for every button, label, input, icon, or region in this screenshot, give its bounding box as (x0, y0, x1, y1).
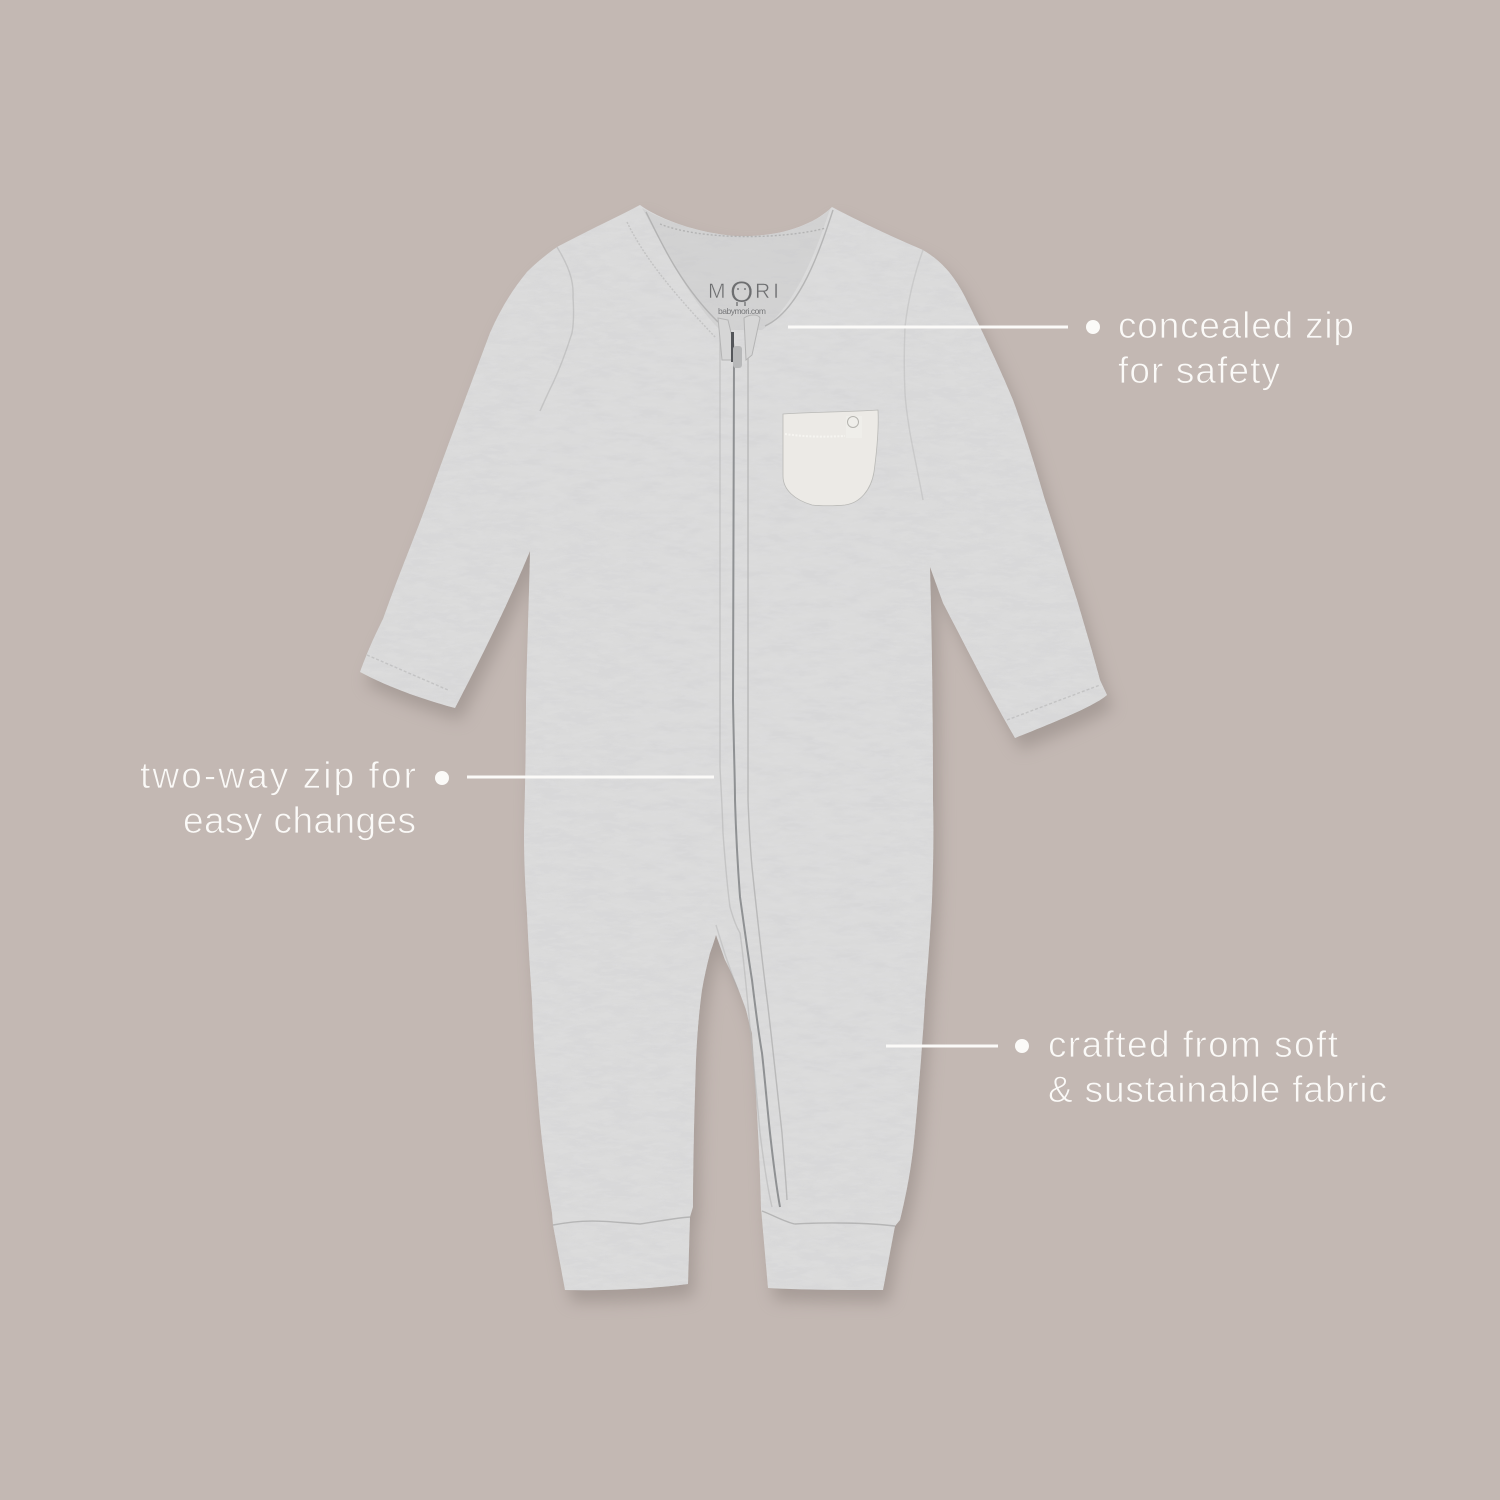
callout: two-way zip (140, 755, 714, 841)
pocket hem (785, 434, 845, 437)
bullet dot (435, 771, 449, 785)
garment: grey zip sleepsuit (340, 190, 1130, 1302)
zip placket (720, 330, 787, 1207)
callout text line two: for safety (1118, 350, 1280, 391)
callout: soft fabric (886, 1024, 1387, 1110)
callout text line two: & sustainable fabric (1048, 1069, 1387, 1110)
pocket button (848, 416, 858, 428)
neck label logo (708, 276, 782, 316)
bullet dot (1086, 320, 1100, 334)
logo wordmark: O (730, 276, 753, 309)
logo url: babymori.com (718, 306, 766, 316)
callout text: concealed zip (1118, 305, 1354, 346)
collar and seam lines (367, 210, 1100, 1226)
logo wordmark: RI (755, 280, 782, 303)
callout: concealed zip (788, 305, 1354, 391)
logo face eyes (737, 288, 745, 306)
logo wordmark: M (708, 280, 726, 303)
leader line (467, 776, 714, 778)
back neck lining (642, 208, 830, 330)
callout text: crafted from soft (1048, 1024, 1339, 1065)
leader line (886, 1044, 998, 1048)
heather fabric texture (382, 226, 1106, 1290)
leader line (788, 326, 1068, 328)
zip pull (718, 315, 760, 368)
callout text line two: easy changes (183, 800, 416, 841)
garment drop shadow (366, 217, 1113, 1302)
callout text: two-way zip for (140, 755, 416, 796)
pocket tab (846, 416, 862, 438)
chest pocket (783, 410, 878, 506)
bullet dot (1015, 1039, 1029, 1053)
garment body silhouette (360, 205, 1107, 1290)
